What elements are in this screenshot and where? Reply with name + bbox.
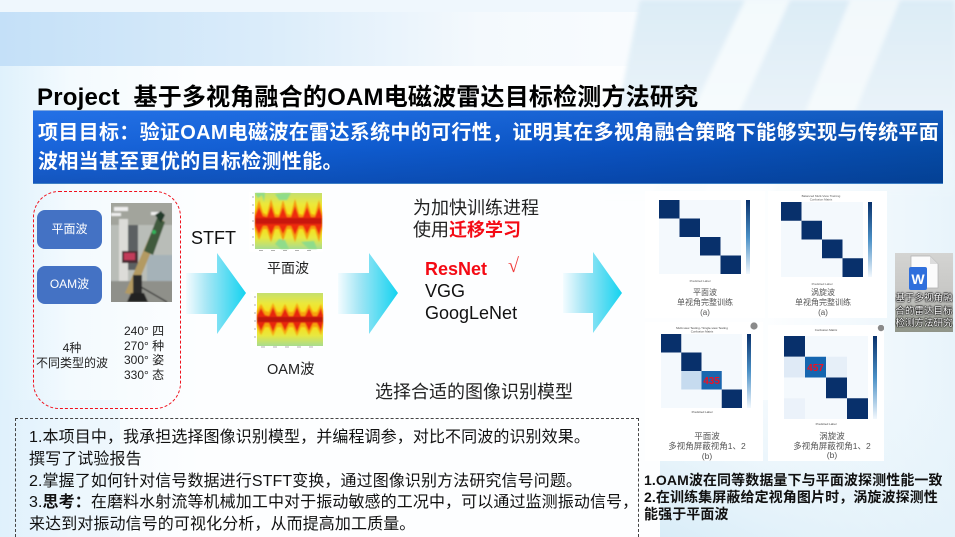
text: four wave types: 4种 [63, 341, 81, 355]
caption d: 多视角屏蔽视角1、2 [793, 440, 871, 450]
text: four wave types [36, 341, 108, 370]
text: conclusions [644, 472, 943, 522]
banner text [38, 122, 939, 173]
button: plane wave: 平面波 [51, 222, 88, 236]
panel: personal contribution text box [15, 418, 639, 537]
contribution text: 3.思考：在磨料水射流等机械加工中对于振动敏感的工况中，可以通过监测振动信号， [29, 494, 638, 511]
chart: matrix d: Predicted Label [816, 422, 837, 426]
contribution text: 来达到对振动信号的可视化分析，从而提高加工质量。 [29, 516, 415, 533]
chart: matrix a [659, 200, 750, 283]
chart: matrix b: Balanced Multi-View Training [802, 194, 841, 198]
chart: matrix a: Predicted Label [690, 279, 711, 283]
banner text: 项目目标：验证OAM电磁波在雷达系统中的可行性，证明其在多视角融合策略下能够实现与传统平面 [38, 122, 939, 144]
list: image recognition models: GoogLeNet [425, 303, 517, 323]
caption a [677, 288, 733, 317]
chart: matrix c: Confusion Matrix [691, 330, 714, 334]
banner text: 波相当甚至更优的目标检测性能。 [38, 151, 343, 173]
text: transfer learning: 使用迁移学习 [413, 220, 521, 240]
chart: matrix d: 457 [807, 363, 824, 374]
label: OAM wave: OAM波 [267, 362, 315, 378]
heatmap: OAM wave spectrogram [254, 293, 324, 348]
caption b [795, 288, 851, 317]
button: OAM wave [37, 266, 102, 304]
label: STFT: STFT [191, 228, 236, 248]
caption a: (a) [700, 308, 710, 317]
icon: word file [909, 256, 938, 290]
chart: matrix d [784, 325, 884, 426]
panel: wave types and postures [33, 191, 181, 409]
chart: matrix b: Predicted Label [812, 282, 833, 286]
caption b: (a) [818, 308, 828, 317]
file name: 基于多视角融合的雷达目标检测方法研究 [895, 293, 952, 329]
text: four wave types: 不同类型的波 [36, 356, 108, 370]
list: image recognition models: ResNet [425, 259, 487, 279]
text: four angles: 300° 姿 [124, 353, 164, 367]
text: four angles: 240° 四 [124, 324, 164, 338]
caption a: 单视角完整训练 [677, 298, 733, 307]
panel: confusion matrix vortex wave single view [768, 191, 887, 318]
contribution text: 1.本项目中，我承担选择图像识别模型，并编程调参，对比不同波的识别效果。 [29, 429, 590, 446]
caption d: (b) [827, 450, 837, 460]
list: image recognition models: VGG [425, 281, 465, 301]
text: conclusions: 能强于平面波 [644, 506, 729, 522]
text: transfer learning [413, 198, 539, 240]
text: conclusions: 1.OAM波在同等数据量下与平面波探测性能一致 [644, 472, 943, 488]
text: four angles: 330° 态 [124, 368, 164, 382]
banner: project goal [33, 110, 943, 184]
contribution text [29, 428, 638, 533]
icon: word document thumbnail [895, 253, 953, 332]
label: plane wave: 平面波 [267, 260, 309, 276]
chart: matrix c: 435 [703, 376, 720, 387]
caption c: 多视角屏蔽视角1、2 [668, 441, 746, 451]
chart: matrix b [781, 194, 872, 286]
chart: matrix c: Predicted Label [692, 410, 713, 414]
caption d: 涡旋波 [819, 431, 845, 441]
icon: check mark: √ [508, 255, 519, 277]
button: OAM wave: OAM波 [50, 277, 89, 291]
caption c: 平面波 [694, 431, 720, 441]
text: transfer learning: 为加快训练进程 [413, 198, 539, 218]
heatmap: plane wave spectrogram [252, 192, 323, 251]
icon: word file: W [911, 271, 925, 287]
contribution text: 2.掌握了如何针对信号数据进行STFT变换，通过图像识别方法研究信号问题。 [29, 473, 582, 490]
caption a: 平面波 [693, 288, 717, 297]
title: Project 基于多视角融合的OAM电磁波雷达目标检测方法研究 [37, 84, 698, 111]
text: choose model: 选择合适的图像识别模型 [375, 382, 573, 402]
contribution text: 撰写了试验报告 [29, 451, 142, 468]
caption b: 涡旋波 [811, 288, 835, 297]
list: image recognition models [425, 259, 517, 323]
caption d [793, 431, 871, 460]
caption c [668, 431, 746, 461]
panel: confusion matrix plane wave single view [645, 191, 765, 318]
chart: matrix b: Confusion Matrix [810, 198, 833, 202]
panel: confusion matrix vortex wave masked views [768, 325, 884, 461]
panel: confusion matrix plane wave masked views [645, 322, 763, 461]
chart: matrix d: Confusion Matrix [815, 328, 838, 332]
text: conclusions: 2.在训练集屏蔽给定视角图片时，涡旋波探测性 [644, 489, 938, 505]
caption c: (b) [702, 451, 712, 461]
chart: matrix c [661, 322, 758, 414]
caption b: 单视角完整训练 [795, 298, 851, 307]
text: four angles: 270° 种 [124, 339, 164, 353]
button: plane wave [37, 210, 102, 249]
photo: radar antenna on tripod [111, 203, 172, 302]
text: four angles [124, 324, 164, 382]
chart: matrix c: Multi-view Testing / Single-view Testing [676, 326, 728, 330]
